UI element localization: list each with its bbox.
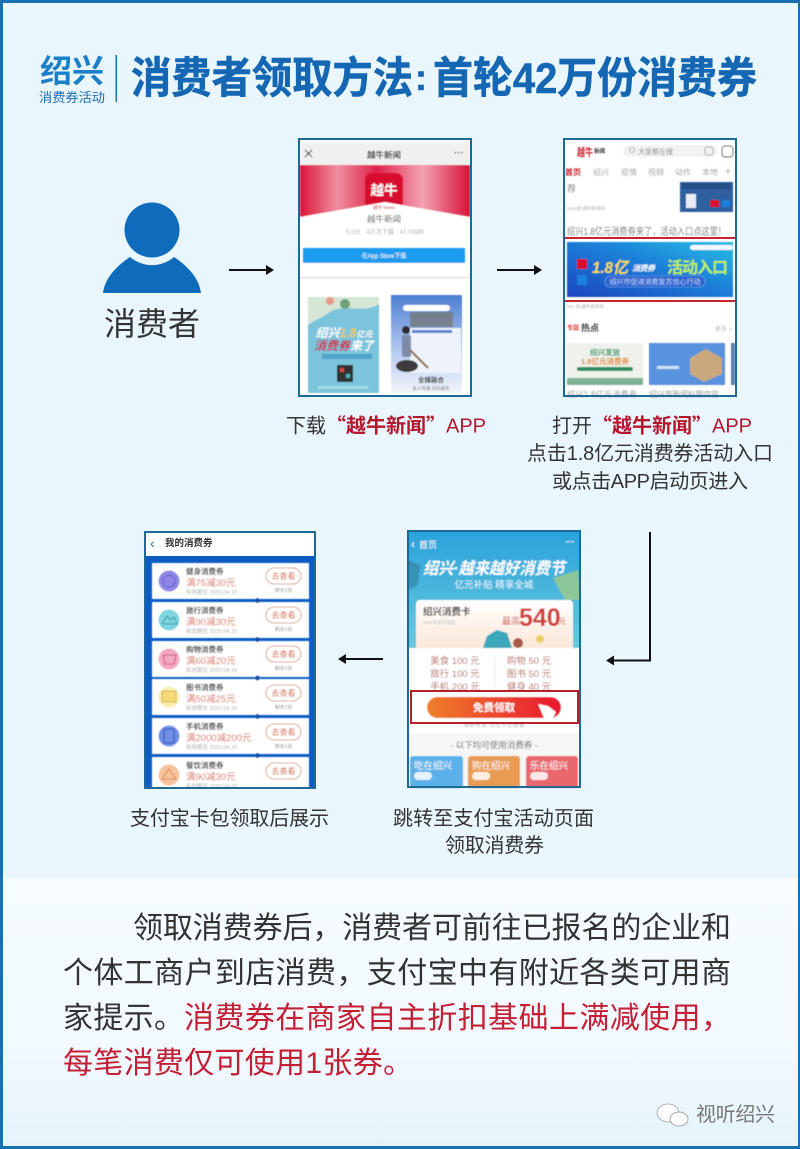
coupon: shopping: 有效期至 2020.04.10 xyxy=(186,666,237,674)
phone: alipay activity page: 购在绍兴 xyxy=(472,760,510,772)
coupon: books: 满50减25元 xyxy=(186,693,236,705)
phone: news app home screen: 更多 > xyxy=(715,325,733,333)
arrow: elbow to alipay page xyxy=(606,532,650,666)
coupon: mobile: 有效期至 2020.04.10 xyxy=(186,743,237,751)
caption: jump to alipay: 跳转至支付宝活动页面 xyxy=(393,807,594,830)
phone: news app home screen: 501 阅 越牛新闻号 xyxy=(567,303,605,310)
phone: news app home screen: 绍兴市促进消费复苏信心行动 xyxy=(610,277,700,286)
coupon: dining: 有效期至 2020.04.10 xyxy=(186,782,237,790)
phone: download app screen: 多人传播 同步服务 xyxy=(412,385,450,392)
label: 消费者: 消费者 xyxy=(104,306,200,342)
coupon: fitness: 去查看 xyxy=(272,571,296,581)
phone: alipay activity page: 绍兴消费卡 xyxy=(423,606,471,618)
phone: my coupons list xyxy=(144,531,316,790)
phone: news app home screen: 5140阅 越牛新闻号 xyxy=(567,205,606,212)
phone: download app screen: 全媒融合 xyxy=(418,375,444,384)
caption: download app: 下载“越牛新闻”APP xyxy=(286,410,486,438)
coupon: shopping xyxy=(152,641,309,677)
title: : xyxy=(415,57,427,98)
phone: news app home screen: 本地 xyxy=(702,167,718,177)
coupon: books: 有效期至 2020.04.10 xyxy=(186,704,237,712)
coupon: travel: 旅行消费券 xyxy=(186,605,224,615)
phone: download app screen: 消费券来了 xyxy=(314,339,376,353)
phone: alipay activity page: 图书 50 元 xyxy=(507,669,552,680)
phone: alipay activity page: 旅行 100 元 xyxy=(430,668,480,680)
caption: open app: 或点击APP启动页进入 xyxy=(552,470,748,493)
phone: news app home screen: 绍兴发放 xyxy=(590,347,620,357)
phone: news app home screen: 首页 xyxy=(565,167,581,177)
coupon: shopping: 剩余2张 xyxy=(275,665,292,672)
phone: my coupons list: ‹ xyxy=(150,535,155,551)
phone: news app home screen: 活动入口 xyxy=(667,259,728,277)
phone: alipay activity page: 亿元补贴 精享全城 xyxy=(455,579,534,591)
coupon: shopping: 购物消费券 xyxy=(186,644,224,654)
phone: news app home screen: 荐 xyxy=(567,184,576,194)
text block: usage explanation: 家提示。 xyxy=(63,1002,184,1035)
logo: 绍兴消费券活动: 绍兴 xyxy=(40,53,104,89)
logo: 绍兴消费券活动: 消费券活动 xyxy=(39,90,105,105)
phone: download app screen: 越牛 xyxy=(370,182,398,198)
watermark: wechat account xyxy=(657,1103,775,1126)
caption: jump to alipay: 领取消费券 xyxy=(445,834,544,857)
phone: news app home screen: 绍兴1.8亿元消费券来了，活动入口点这里！ xyxy=(567,225,726,238)
coupon: dining: 去查看 xyxy=(272,766,296,776)
phone: alipay activity page: 首页 xyxy=(419,539,437,550)
coupon: shopping: 满60减20元 xyxy=(186,655,236,667)
coupon: travel: 有效期至 2020.04.10 xyxy=(186,627,237,635)
phone: news app home screen: 越牛 xyxy=(577,145,593,159)
phone: download app screen: 绍兴1.8亿元 xyxy=(316,326,373,340)
phone: news app home screen: 绍兴市新闻标题内容 xyxy=(649,389,719,399)
coupon: travel: 剩余2张 xyxy=(275,626,292,633)
coupon: travel: 去查看 xyxy=(272,610,296,620)
phone: download app screen: 越牛 News xyxy=(373,204,395,211)
coupon: mobile: 剩余1张 xyxy=(275,743,292,750)
phone: alipay activity page: 健身 40 元 xyxy=(507,681,552,693)
phone: alipay activity page: ··· xyxy=(566,537,574,547)
phone: download app screen: ··· xyxy=(454,148,464,159)
phone: alipay activity page: 免费领取 xyxy=(473,701,515,714)
arrow: alipay page to card wallet xyxy=(338,654,383,664)
phone: alipay activity page xyxy=(407,530,581,788)
phone: alipay activity page: 美食 100 元 xyxy=(430,655,480,667)
phone: news app home screen: 绍兴 xyxy=(593,167,609,177)
phone: news app home screen xyxy=(563,138,737,399)
phone: alipay activity page: 购物 50 元 xyxy=(507,655,552,667)
phone: news app home screen: 1.8亿 xyxy=(592,259,630,277)
coupon: fitness: 剩余2张 xyxy=(275,587,292,594)
phone: alipay activity page: 最高 xyxy=(502,615,520,626)
phone: alipay activity page: 领券有效 可在卡包查看 xyxy=(463,721,525,729)
caption: card wallet display: 支付宝卡包领取后展示 xyxy=(130,807,329,830)
coupon: books xyxy=(152,679,309,715)
coupon: fitness xyxy=(152,563,309,599)
coupon: mobile: 手机消费券 xyxy=(186,721,224,731)
phone: news app home screen: 视频 xyxy=(648,167,664,177)
coupon: dining: 满90减30元 xyxy=(186,771,236,783)
phone: news app home screen: 疫情 xyxy=(621,167,637,177)
coupon: mobile: 去查看 xyxy=(272,727,296,737)
phone: news app home screen: 动作 xyxy=(675,167,691,177)
phone: news app home screen: 热点 xyxy=(581,322,599,333)
coupon: fitness: 满75减30元 xyxy=(186,577,236,589)
phone: alipay activity page: 手机 200 元 xyxy=(430,681,480,693)
phone: alipay activity page: ‹ xyxy=(411,537,415,551)
coupon: mobile xyxy=(152,718,309,754)
coupon: travel xyxy=(152,602,309,638)
coupon: fitness: 有效期至 2020.04.10 xyxy=(186,588,237,596)
text block: usage explanation: 领取消费券后，消费者可前往已报名的企业和 xyxy=(133,912,731,945)
coupon: fitness: 健身消费券 xyxy=(186,566,224,576)
coupon: books: 剩余2张 xyxy=(275,704,292,711)
phone: alipay activity page: 2020年前可领取 xyxy=(423,619,456,626)
text block: usage explanation: 每笔消费仅可使用1张券。 xyxy=(63,1047,413,1080)
arrow: download to open xyxy=(497,265,542,275)
title: 消费者领取方法 xyxy=(131,55,413,103)
phone: download app screen xyxy=(298,138,472,397)
coupon: mobile: 满2000减200元 xyxy=(186,732,252,744)
phone: news app home screen: 大家都在搜 xyxy=(638,147,673,156)
caption: open app: 点击1.8亿元消费券活动入口 xyxy=(527,442,773,465)
phone: news app home screen: 绍兴1.8亿元消费券 xyxy=(567,389,637,399)
coupon: dining xyxy=(152,757,309,790)
phone: download app screen: 越牛新闻 xyxy=(367,150,401,160)
title xyxy=(131,55,757,103)
phone: alipay activity page: - 以下均可使用消费券 - xyxy=(451,740,538,750)
text block: usage explanation xyxy=(63,912,731,1080)
phone: download app screen: 在App Store下载 xyxy=(362,252,406,260)
text block: usage explanation: 个体工商户到店消费，支付宝中有附近各类可用商 xyxy=(63,957,731,990)
icon: consumer person xyxy=(103,202,201,293)
logo: 绍兴消费券活动 xyxy=(39,53,117,105)
caption: open app: 打开“越牛新闻”APP xyxy=(552,410,752,438)
phone: my coupons list: 我的消费券 xyxy=(165,537,213,549)
phone: download app screen: 越牛新闻 xyxy=(367,214,401,224)
text block: usage explanation: 消费券在商家自主折扣基础上满减使用， xyxy=(184,1002,731,1035)
phone: alipay activity page: 元 xyxy=(558,617,566,626)
arrow: consumer to download xyxy=(229,265,274,275)
phone: news app home screen: + xyxy=(725,166,731,178)
watermark: wechat account: 视听绍兴 xyxy=(696,1103,775,1126)
coupon: books: 图书消费券 xyxy=(186,682,224,692)
coupon: shopping: 去查看 xyxy=(272,649,296,659)
phone: news app home screen: 专题 xyxy=(567,324,579,332)
phone: alipay activity page: 吃在绍兴 xyxy=(414,760,452,772)
coupon: travel: 满90减30元 xyxy=(186,616,236,628)
phone: alipay activity page: 绍兴·越来越好消费节 xyxy=(423,559,567,578)
caption: jump to alipay xyxy=(393,807,594,857)
phone: alipay activity page: 540 xyxy=(519,604,561,632)
phone: download app screen: 5.0分 4万次下载 47.05MB xyxy=(346,228,424,236)
title: 首轮42万份消费券 xyxy=(433,55,757,103)
phone: news app home screen: 1.8亿元消费券 xyxy=(581,356,629,366)
caption: open app xyxy=(527,410,773,493)
phone: news app home screen: 新闻 xyxy=(594,147,606,155)
phone: alipay activity page: 乐在绍兴 xyxy=(530,760,568,772)
coupon: books: 去查看 xyxy=(272,688,296,698)
coupon: dining: 餐饮消费券 xyxy=(186,760,224,770)
phone: news app home screen: 消费券 xyxy=(632,264,656,273)
